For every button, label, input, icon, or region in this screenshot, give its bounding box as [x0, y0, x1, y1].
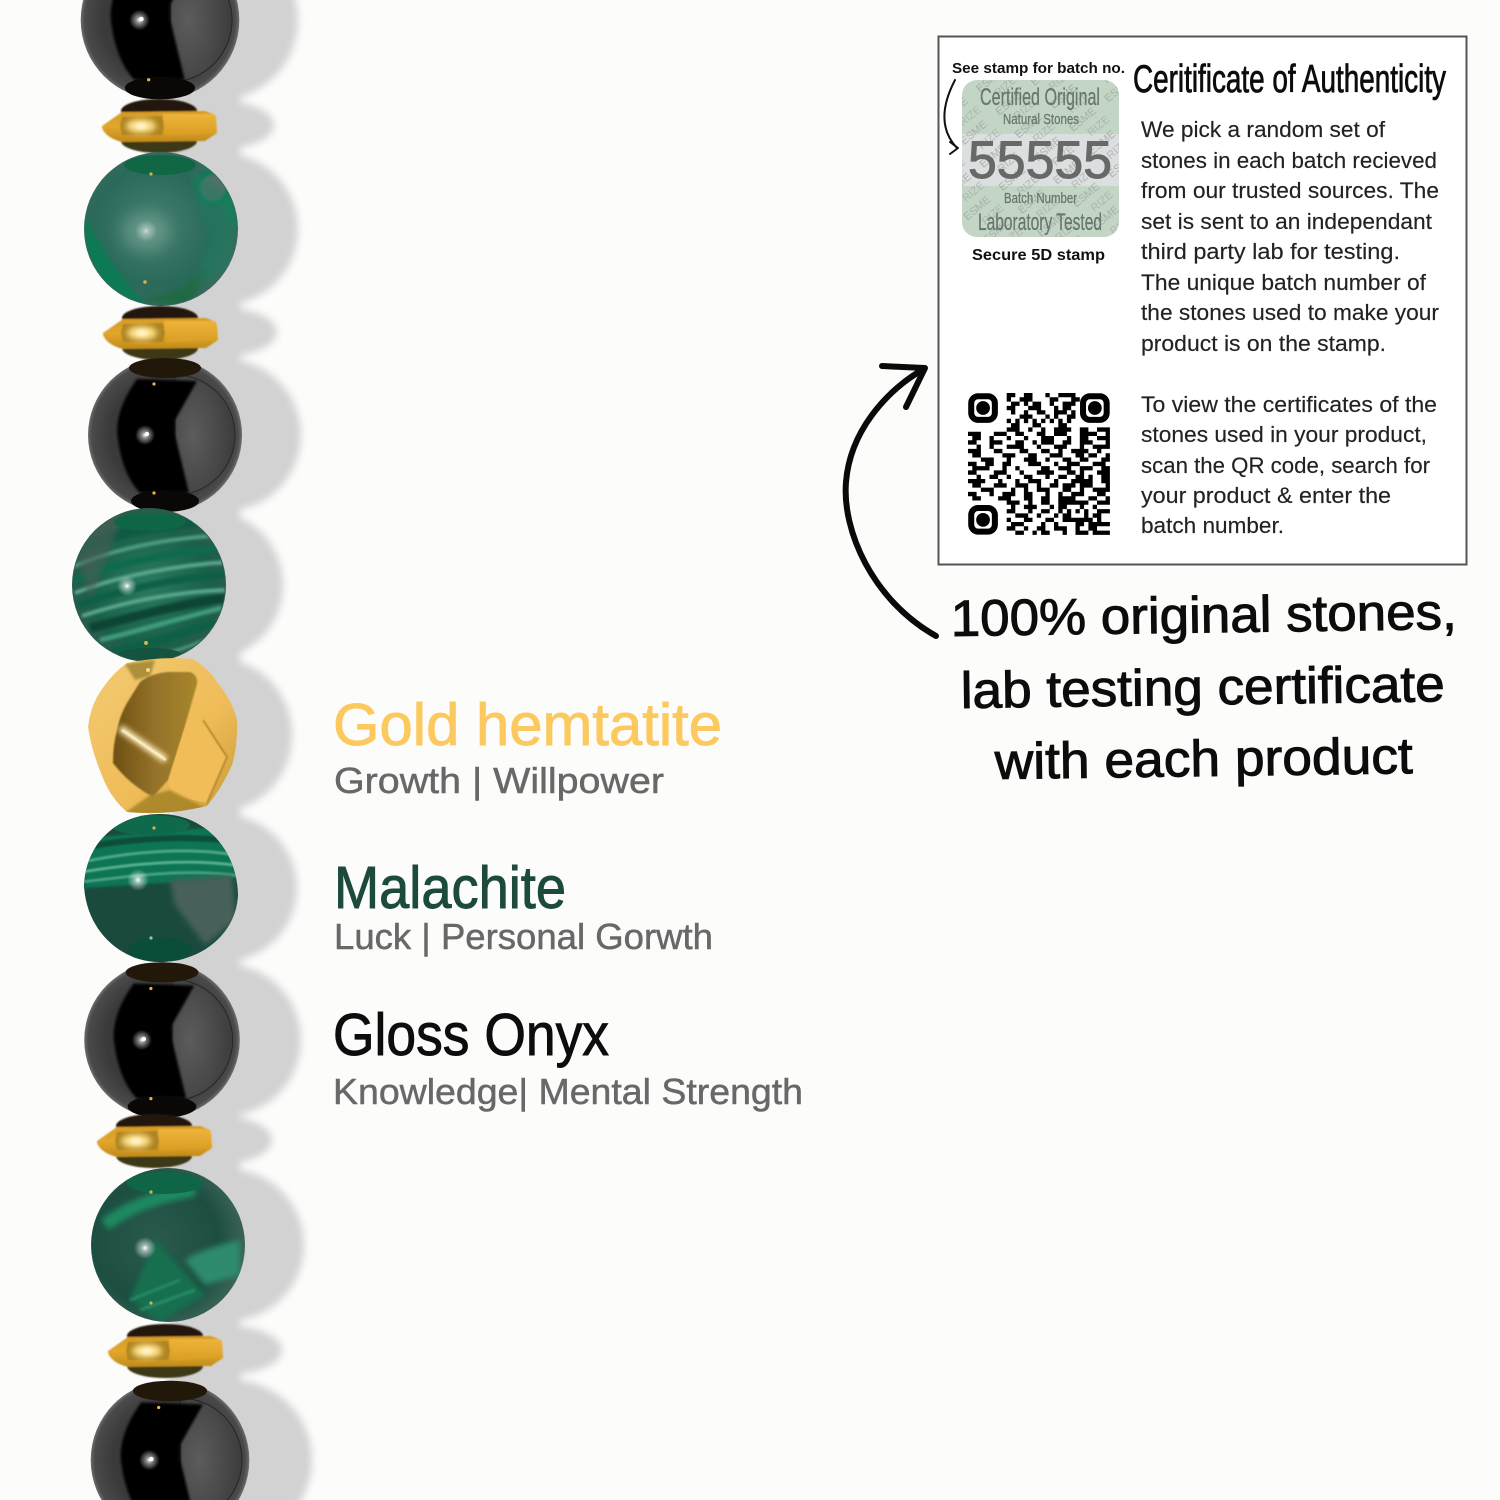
spacer: gold 3	[97, 1114, 212, 1168]
panel: certificate of authenticity	[938, 36, 1466, 564]
text block: batch testing: stones in each batch recieved	[1141, 148, 1437, 173]
stone: malachite: Malachite	[334, 855, 566, 921]
bead string	[70, 0, 249, 1500]
label: secure stamp: Secure 5D stamp	[972, 247, 1105, 264]
stamp: certified original batch number: Natural Stones	[1003, 111, 1079, 128]
spacer: gold 2	[103, 306, 218, 360]
bead: malachite 3	[82, 814, 240, 963]
text block: batch testing: The unique batch number of	[1141, 270, 1427, 295]
text block: batch testing	[1141, 117, 1440, 356]
bead shadows	[133, 0, 312, 1500]
stamp: certified original batch number: Laboratory Tested	[978, 209, 1102, 236]
icon: QR code	[968, 395, 1110, 533]
stone: gloss onyx: Knowledge| Mental Strength	[333, 1071, 803, 1112]
stamp: certified original batch number: Batch Number	[1004, 190, 1077, 207]
headline: original stones	[950, 583, 1457, 790]
text block: scan QR: your product & enter the	[1141, 483, 1391, 508]
stamp: certified original batch number: 55555	[968, 131, 1112, 190]
stone: gold hemtatite	[333, 692, 722, 801]
bead: malachite 2	[70, 508, 228, 662]
text block: batch testing: set is sent to an independant	[1141, 209, 1433, 234]
spacer: gold 4	[108, 1324, 223, 1378]
text block: scan QR: batch number.	[1141, 513, 1284, 538]
text block: scan QR: scan the QR code, search for	[1141, 453, 1430, 478]
text block: scan QR	[1141, 392, 1437, 538]
stone: malachite	[334, 855, 713, 957]
spacer: gold 1	[102, 99, 217, 153]
arrow: headline to certificate	[846, 366, 936, 636]
bead: malachite 1	[80, 152, 245, 310]
bead: gold hematite	[88, 658, 237, 815]
text block: batch testing: from our trusted sources. The	[1141, 178, 1439, 203]
bead: onyx bottom	[91, 1381, 249, 1500]
text block: batch testing: third party lab for testing.	[1141, 239, 1400, 264]
bead: onyx 3	[84, 962, 240, 1118]
bead: malachite 4	[91, 1168, 245, 1322]
stone list	[333, 692, 803, 1112]
text block: batch testing: the stones used to make your	[1141, 300, 1440, 325]
stone: malachite: Luck | Personal Gorwth	[334, 916, 713, 957]
stone: gold hemtatite: Growth | Willpower	[334, 760, 664, 801]
headline: original stones: lab testing certificate	[960, 655, 1445, 719]
headline: original stones: 100% original stones,	[950, 583, 1457, 647]
text block: scan QR: To view the certificates of the	[1141, 392, 1437, 417]
stamp: certified original batch number	[962, 80, 1119, 237]
stone: gold hemtatite: Gold hemtatite	[333, 692, 722, 758]
bead: onyx 2	[88, 358, 242, 512]
stone: gloss onyx	[333, 1002, 803, 1112]
headline: original stones: with each product	[993, 727, 1413, 790]
label: see stamp: See stamp for batch no.	[952, 61, 1125, 77]
bead: onyx top	[81, 0, 239, 99]
icon: small curved arrow	[944, 80, 958, 154]
text block: batch testing: We pick a random set of	[1141, 117, 1386, 142]
stamp: certified original batch number: Certified Original	[980, 84, 1100, 111]
text block: batch testing: product is on the stamp.	[1141, 331, 1386, 356]
stone: gloss onyx: Gloss Onyx	[333, 1002, 609, 1068]
text block: scan QR: stones used in your product,	[1141, 422, 1427, 447]
